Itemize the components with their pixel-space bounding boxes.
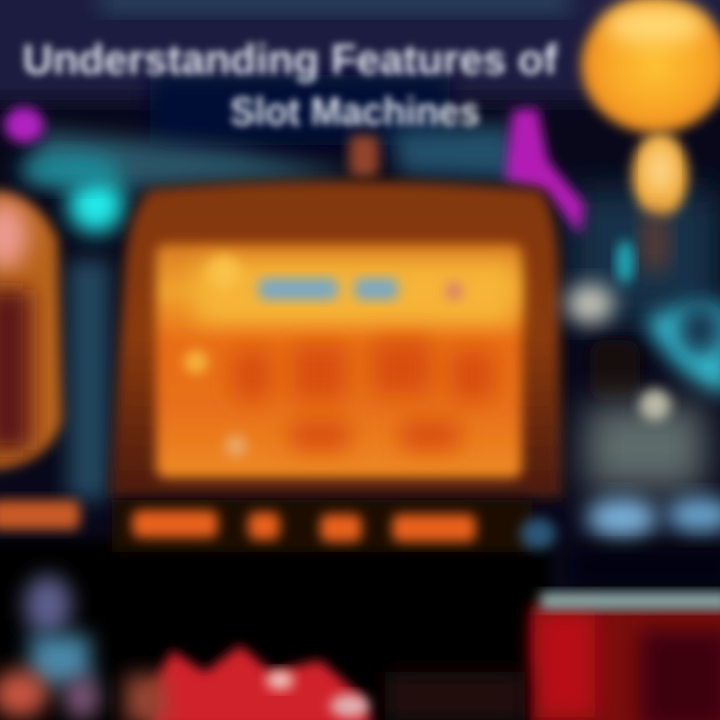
screen top yellow row <box>195 262 515 324</box>
machine screen <box>156 244 522 478</box>
right side figures <box>566 240 720 584</box>
neon accent: magenta left <box>4 107 44 143</box>
slot machine: main <box>110 135 562 552</box>
title <box>22 36 558 134</box>
machine cabinet <box>110 181 562 498</box>
machine control strip <box>112 500 532 552</box>
blue figure bottom left <box>0 575 100 720</box>
control side button <box>520 518 556 550</box>
screen highlight dots <box>184 256 247 457</box>
control buttons <box>132 510 476 542</box>
red decoration bottom centre <box>125 645 525 720</box>
neon accent: cyan glow <box>68 177 124 233</box>
title: Slot Machines <box>230 90 480 134</box>
neon accent: magenta right <box>505 108 585 235</box>
title: Understanding Features of <box>22 36 558 84</box>
hanging lamp <box>581 0 720 270</box>
slot machine: left partial <box>0 190 80 530</box>
machine top knob <box>349 135 379 177</box>
red counter bottom right <box>530 592 720 720</box>
screen reel symbols <box>232 340 495 450</box>
screen blue pills <box>258 278 462 300</box>
